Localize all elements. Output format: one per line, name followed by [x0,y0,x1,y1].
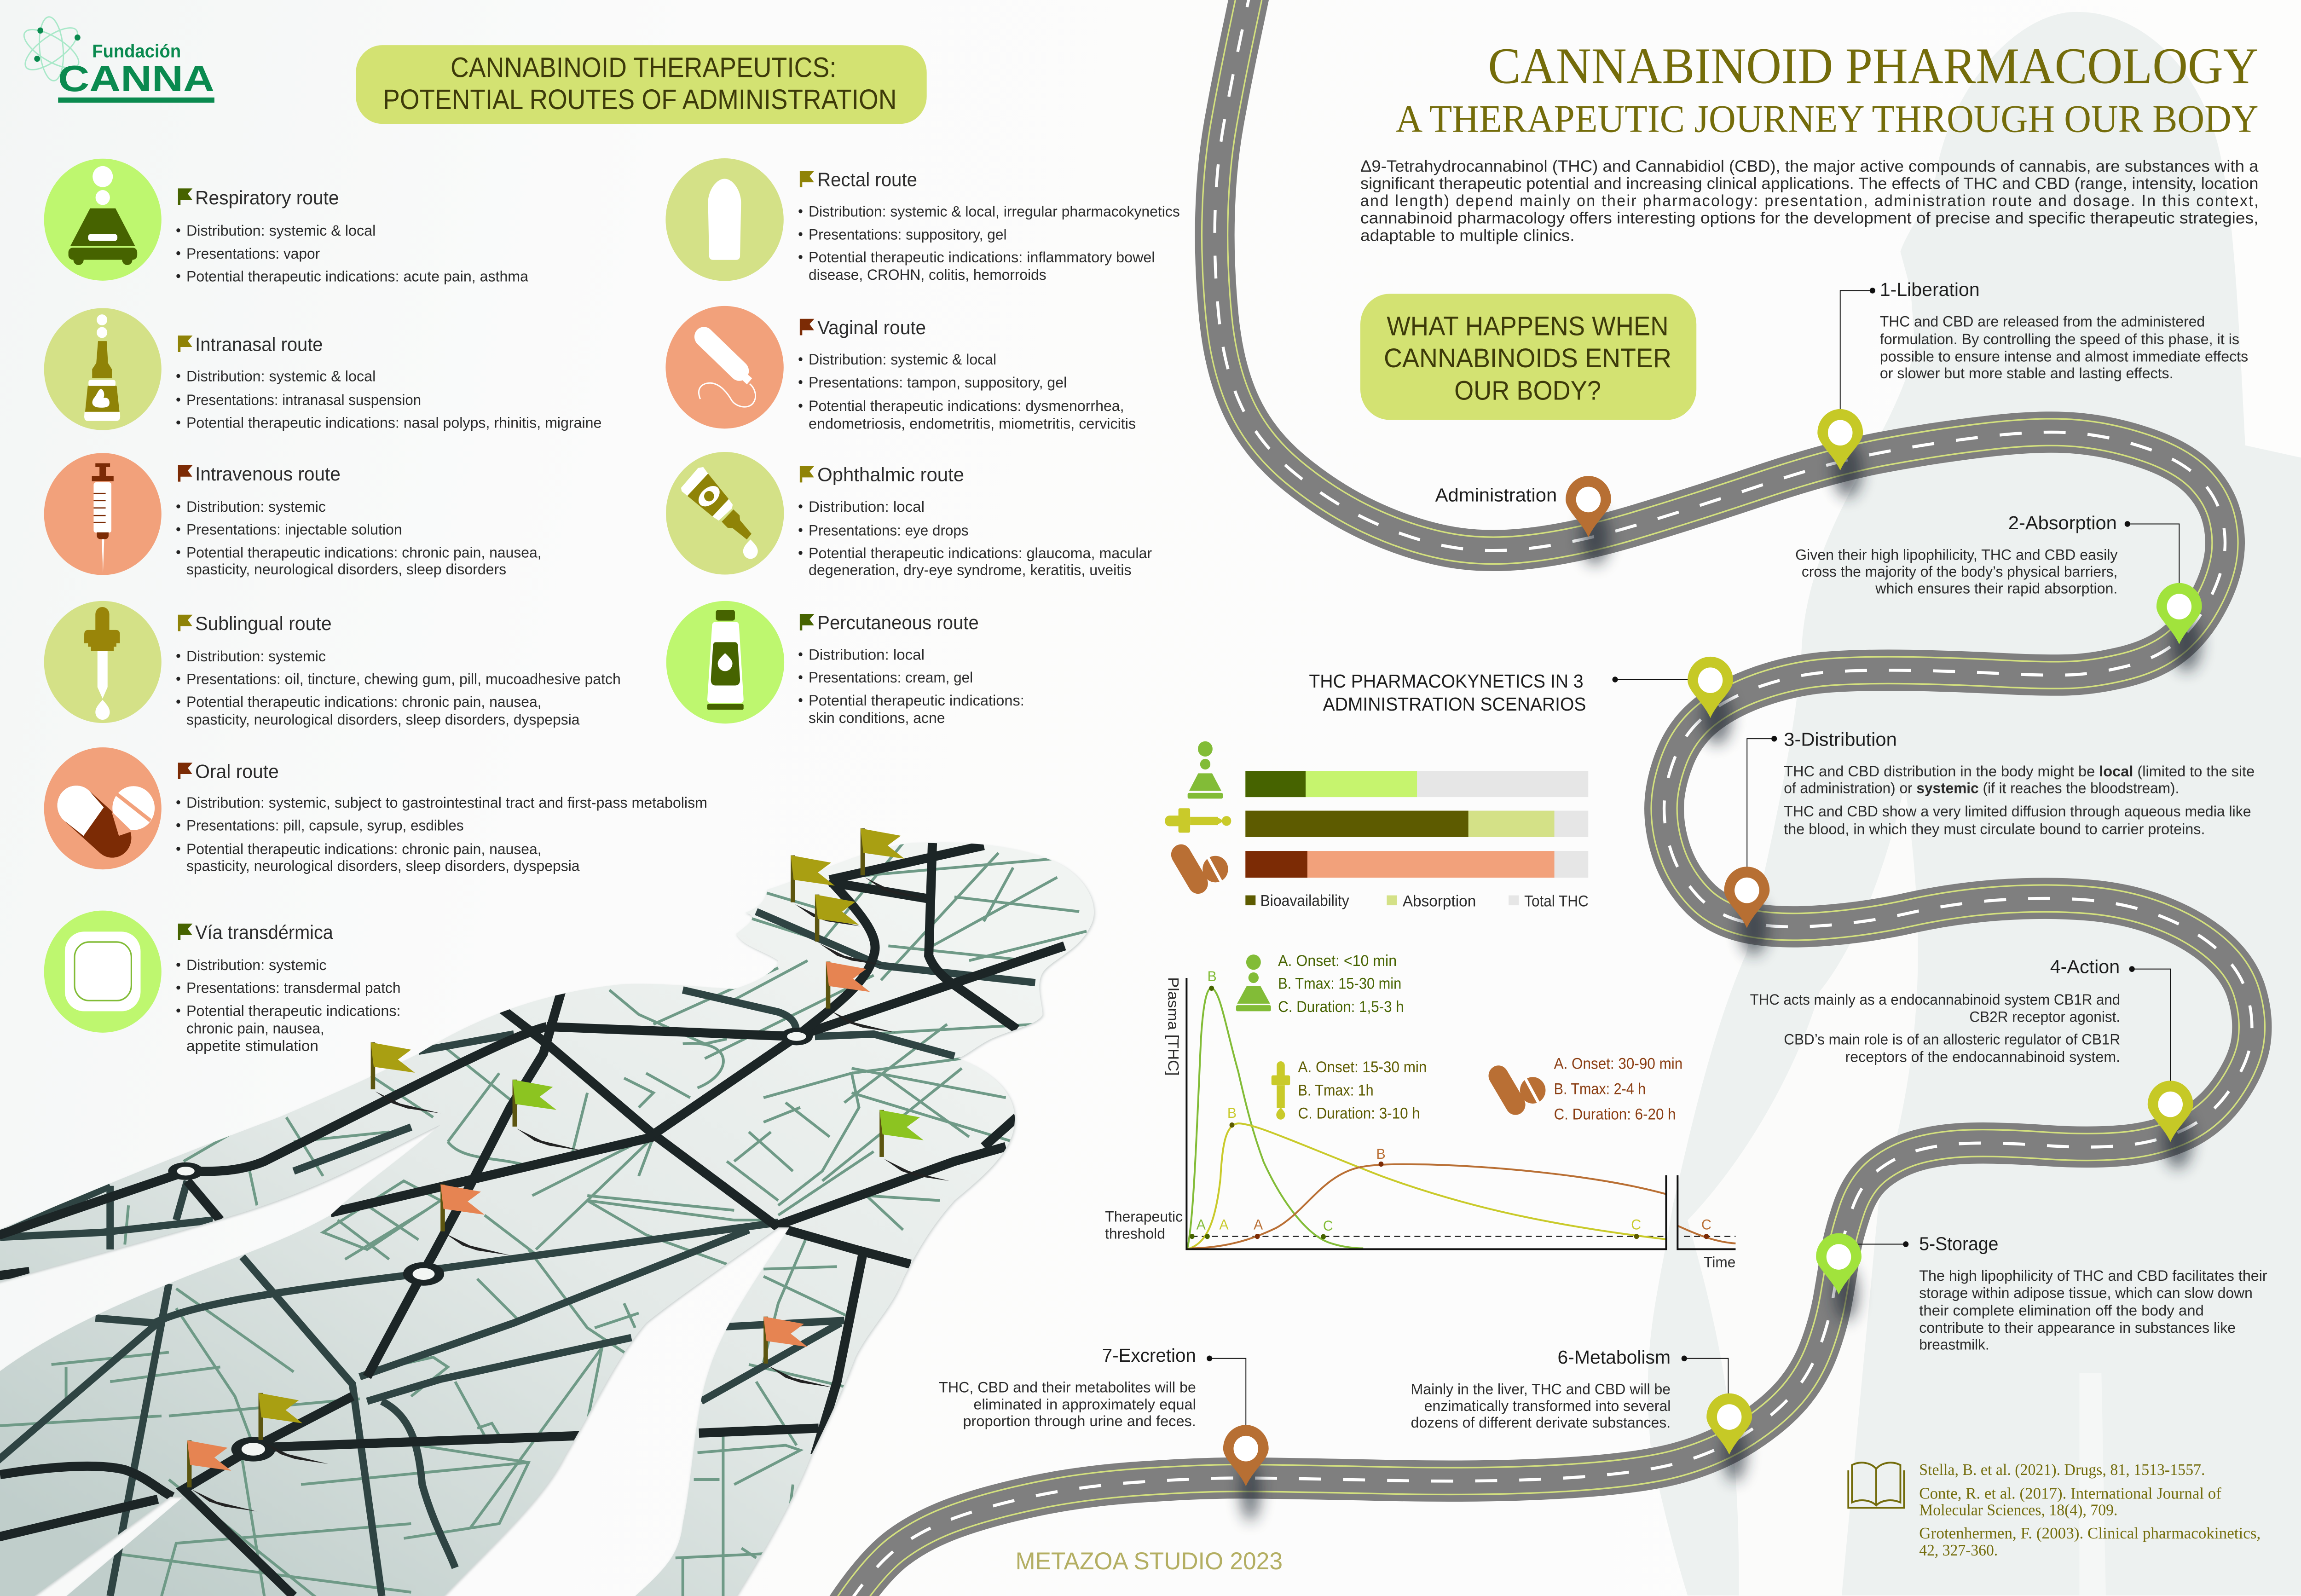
step: 3-Distribution: THC and CBD distribution in the body might be local (limited to the site [1784,763,2255,780]
line chart: B [1227,1104,1237,1121]
inhalation parameters: A. Onset: <10 min [1278,952,1397,970]
oral parameters: C. Duration: 6-20 h [1554,1106,1676,1123]
line chart: A [1219,1216,1229,1233]
sublingual parameters: B. Tmax: 1h [1298,1082,1374,1099]
flag: chest right [879,1110,949,1181]
panel: rectal route: Distribution: systemic & local, irregular pharmacokynetics [809,203,1180,220]
step: 1-Liberation: formulation. By controlling the speed of this phase, it is [1880,331,2239,347]
panel: transdermal route: Presentations: transdermal patch [186,979,401,996]
panel: transdermal route: appetite stimulation [186,1037,318,1054]
panel: intranasal route: Distribution: systemic & local [186,368,376,385]
flag: head 1 [861,828,930,899]
line chart: C [1323,1218,1333,1234]
step: 5-Storage: contribute to their appearance in substances like [1919,1319,2236,1336]
step: administration: Administration [1435,484,1557,506]
step: 1-Liberation: 1-Liberation [1880,278,1980,300]
flag: left leg orange [187,1440,257,1511]
step: 7-Excretion: 7-Excretion [1102,1344,1196,1366]
panel: transdermal route [44,911,401,1054]
step: administration [1435,476,1611,537]
background body silhouette [1648,12,2301,1596]
panel: intranasal route: Potential therapeutic indications: nasal polyps, rhinitis, migraine [186,414,601,431]
step: 5-Storage: breastmilk. [1919,1336,1989,1353]
sublingual parameters: C. Duration: 3-10 h [1298,1105,1420,1122]
panel: respiratory route: Presentations: vapor [186,245,320,262]
intro paragraph: and length) depend mainly on their pharmacology: presentation, administration route and dosage. In this context, [1360,192,2259,210]
panel: transdermal route: Potential therapeutic indications: [186,1002,401,1019]
step: 3-Distribution: THC and CBD show a very limited diffusion through aqueous media like [1784,803,2251,820]
step: 7-Excretion [939,1344,1269,1486]
flag: abdomen [440,1185,510,1255]
panel: ophthalmic route: Distribution: local [809,498,925,515]
panel: percutaneous route: Percutaneous route [817,612,979,633]
panel: intravenous route: Potential therapeutic indications: chronic pain, nausea, [186,544,542,561]
panel: sublingual route: spasticity, neurological disorders, sleep disorders, dyspepsia [186,711,580,728]
flag: chest left [513,1080,582,1151]
line chart: Time [1704,1254,1735,1271]
panel: intranasal route: Intranasal route [195,334,323,355]
flag: left leg olive [259,1393,328,1464]
question box: CANNABINOIDS ENTER [1384,343,1671,373]
main title [1396,38,2259,140]
panel: ophthalmic route: Potential therapeutic indications: glaucoma, macular [809,545,1152,561]
panel: transdermal route: chronic pain, nausea, [186,1020,324,1037]
panel: rectal route: disease, CROHN, colitis, hemorroids [809,266,1046,283]
inhalation parameters: B. Tmax: 15-30 min [1278,975,1401,993]
oral parameters [1498,1055,1682,1123]
panel: vaginal route: Potential therapeutic indications: dysmenorrhea, [809,398,1124,414]
panel: vaginal route [665,306,1136,432]
inhalation parameters: C. Duration: 1,5-3 h [1278,999,1404,1016]
references: Stella, B. et al. (2021). Drugs, 81, 1513-1557. [1919,1461,2205,1479]
intro paragraph: Δ9-Tetrahydrocannabinol (THC) and Cannabidiol (CBD), the major active compounds of cannabis, are substances with a [1360,158,2259,175]
panel: ophthalmic route: Ophthalmic route [817,464,964,486]
step: 3-Distribution [1724,729,2255,928]
intro paragraph: adaptable to multiple clinics. [1360,227,1575,244]
panel: oral route: Potential therapeutic indications: chronic pain, nausea, [186,840,542,857]
oral parameters: A. Onset: 30-90 min [1554,1055,1682,1073]
panel: percutaneous route: skin conditions, acne [809,709,945,726]
panel: ophthalmic route: degeneration, dry-eye syndrome, keratitis, uveitis [809,561,1132,578]
panel: transdermal route: Distribution: systemic [186,956,327,973]
logo: Fundación CANNA: Fundación [92,41,181,61]
pharmacokinetics heading with pin: THC PHARMACOKYNETICS IN 3 [1309,670,1584,692]
credit: Metazoa Studio: METAZOA STUDIO 2023 [1016,1548,1283,1575]
panel: intranasal route [44,308,601,431]
panel: vaginal route: Presentations: tampon, suppository, gel [809,374,1067,391]
panel: vaginal route: Distribution: systemic & local [809,351,996,368]
step: 2-Absorption: which ensures their rapid absorption. [1875,580,2117,596]
step: 1-Liberation: possible to ensure intense and almost immediate effects [1880,348,2248,365]
line chart: B [1208,968,1217,984]
step: 4-Action: receptors of the endocannabinoid system. [1845,1048,2120,1065]
heading: routes of administration: POTENTIAL ROUTES OF ADMINISTRATION [383,84,896,115]
oral parameters: B. Tmax: 2-4 h [1554,1081,1646,1098]
step: 5-Storage: their complete elimination off the body and [1919,1302,2204,1318]
panel: percutaneous route [666,601,1024,726]
step: 5-Storage [1816,1233,2267,1353]
flag: arm [371,1042,440,1113]
question box [1360,294,1696,420]
step: 4-Action: CB2R receptor agonist. [1969,1008,2120,1025]
icon: vapor [1188,741,1223,798]
step: 5-Storage: storage within adipose tissue, which can slow down [1919,1284,2253,1301]
panel: oral route: Oral route [195,761,279,782]
step: 6-Metabolism: Mainly in the liver, THC and CBD will be [1411,1381,1671,1397]
main title: CANNABINOID PHARMACOLOGY [1488,38,2259,94]
panel: rectal route: Presentations: suppository, gel [809,226,1006,243]
legend: Bioavailability [1260,892,1349,910]
panel: transdermal route: Vía transdérmica [195,921,333,943]
references: Conte, R. et al. (2017). International Journal of [1919,1485,2221,1503]
panel: oral route: Distribution: systemic, subject to gastrointestinal tract and first-pass metabolism [186,794,707,811]
panel: percutaneous route: Presentations: cream, gel [809,669,973,686]
panel: percutaneous route: Potential therapeutic indications: [809,692,1024,709]
panel: sublingual route: Presentations: oil, tincture, chewing gum, pill, mucoadhesive patch [186,671,621,688]
panel: ophthalmic route: Presentations: eye drops [809,522,969,538]
line chart: Therapeutic [1105,1208,1183,1225]
panel: intravenous route: Intravenous route [195,463,341,485]
step: 2-Absorption: cross the majority of the body’s physical barriers, [1802,563,2117,580]
references: Molecular Sciences, 18(4), 709. [1919,1501,2117,1519]
intro paragraph: significant therapeutic potential and increasing clinical applications. The effects of THC and CBD (range, intensity, location [1360,175,2259,193]
logo: Fundación CANNA: CANNA [58,58,214,99]
step: 2-Absorption: 2-Absorption [2008,512,2117,533]
intro paragraph [1360,158,2259,244]
pharmacokinetics heading with pin: ADMINISTRATION SCENARIOS [1323,693,1586,715]
panel: intravenous route: Presentations: injectable solution [186,521,402,538]
step: 5-Storage: 5-Storage [1919,1233,1998,1255]
step: 4-Action [1750,956,2193,1142]
references [1848,1461,2261,1559]
legend: Absorption [1403,893,1476,910]
step: 7-Excretion: proportion through urine and feces. [963,1412,1196,1429]
step: 7-Excretion: THC, CBD and their metabolites will be [939,1379,1196,1395]
step: 6-Metabolism: 6-Metabolism [1558,1346,1671,1368]
flag: right leg [763,1317,833,1388]
road [844,0,2252,1596]
panel: respiratory route: Respiratory route [195,187,339,208]
logo: Fundación CANNA [19,16,214,103]
legend: Total THC [1524,893,1589,910]
pin shadows [1240,442,2201,1521]
icon: dropper [1165,808,1231,833]
intro paragraph: cannabinoid pharmacology offers interesting options for the development of precise and specific therapeutic strategies, [1360,209,2259,227]
curves [1186,978,1735,1249]
pharmacokinetics heading with pin [1309,657,1733,718]
step: 6-Metabolism: dozens of different derivate substances. [1411,1414,1671,1431]
step: 6-Metabolism: enzimatically transformed into several [1424,1397,1671,1414]
panel: respiratory route: Potential therapeutic indications: acute pain, asthma [186,268,528,285]
line chart: threshold [1105,1225,1165,1242]
line chart: C [1701,1216,1711,1233]
line chart: Plasma [THC] [1164,977,1181,1076]
legend [1245,892,1589,910]
sublingual parameters [1272,1058,1427,1122]
icon: pill [1181,855,1228,884]
flag: head 2 [791,856,861,926]
line chart: A [1254,1216,1263,1233]
panel: oral route [44,747,707,874]
panel: rectal route: Rectal route [817,169,917,191]
step: 7-Excretion: eliminated in approximately equal [973,1396,1196,1413]
panel: sublingual route: Distribution: systemic [186,648,326,665]
step: 4-Action: 4-Action [2050,956,2120,977]
panel: intravenous route: spasticity, neurological disorders, sleep disorders [186,561,506,578]
heading: routes of administration: CANNABINOID THERAPEUTICS: [451,52,837,83]
panel: respiratory route: Distribution: systemic & local [186,222,376,239]
panel: sublingual route: Potential therapeutic indications: chronic pain, nausea, [186,694,542,710]
panel: sublingual route: Sublingual route [195,613,332,634]
question box: WHAT HAPPENS WHEN [1387,312,1669,341]
sublingual parameters: A. Onset: 15-30 min [1298,1058,1427,1076]
step: 3-Distribution: the blood, in which they must circulate bound to carrier proteins. [1784,821,2205,837]
panel: respiratory route [44,159,528,285]
panel: intranasal route: Presentations: intranasal suspension [186,391,421,408]
line chart: B [1376,1145,1386,1162]
body map with streets and flags [0,828,1094,1596]
step: 6-Metabolism [1411,1346,1752,1455]
step: 4-Action: THC acts mainly as a endocannabinoid system CB1R and [1750,991,2120,1008]
line chart: A [1197,1216,1206,1233]
flag: head 3 [815,895,885,966]
panel: rectal route: Potential therapeutic indications: inflammatory bowel [809,249,1155,266]
step: 1-Liberation: THC and CBD are released from the administered [1880,313,2205,330]
step: 3-Distribution: 3-Distribution [1784,729,1897,750]
panel: oral route: spasticity, neurological disorders, sleep disorders, dyspepsia [186,857,580,874]
icon: book [1848,1463,1904,1508]
panel: intravenous route [44,453,542,578]
step: 1-Liberation [1817,278,2248,470]
heading: routes of administration [356,45,927,124]
panel: ophthalmic route [666,452,1152,578]
panel: intravenous route: Distribution: systemic [186,498,326,515]
flag: neck [826,961,896,1033]
line chart [1105,952,1735,1271]
question box: OUR BODY? [1454,376,1601,406]
panel: vaginal route: Vaginal route [817,317,926,338]
panel: oral route: Presentations: pill, capsule, syrup, esdibles [186,817,464,834]
step: 5-Storage: The high lipophilicity of THC and CBD facilitates their [1919,1267,2267,1284]
panel: percutaneous route: Distribution: local [809,646,925,663]
panel: rectal route [665,158,1180,283]
line chart: C [1631,1216,1641,1233]
inhalation parameters [1236,952,1404,1016]
step: 1-Liberation: or slower but more stable and lasting effects. [1880,364,2174,382]
main title: A THERAPEUTIC JOURNEY THROUGH OUR BODY [1396,97,2259,140]
bar chart [1165,741,1589,910]
references: 42, 327-360. [1919,1541,1998,1559]
step: 2-Absorption: Given their high lipophilicity, THC and CBD easily [1795,546,2118,563]
step: 2-Absorption [1795,512,2202,644]
step: 3-Distribution: of administration) or systemic (if it reaches the bloodstream). [1784,780,2179,797]
panel: vaginal route: endometriosis, endometritis, miometritis, cervicitis [809,415,1136,432]
panel: sublingual route [44,601,621,728]
step: 4-Action: CBD’s main role is of an allosteric regulator of CB1R [1784,1031,2120,1047]
references: Grotenhermen, F. (2003). Clinical pharmacokinetics, [1919,1525,2261,1542]
